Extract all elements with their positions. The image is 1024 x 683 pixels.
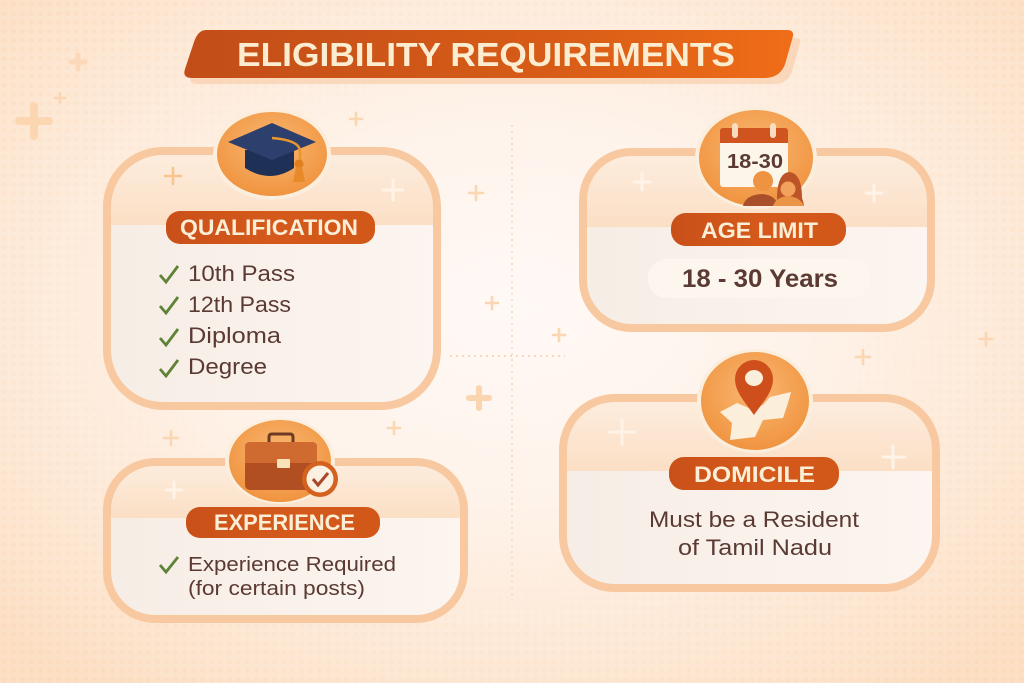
label: qualification: QUALIFICATION <box>180 215 358 240</box>
panel: experience <box>103 418 468 623</box>
panel: qualification <box>103 108 441 410</box>
value: age range <box>648 259 870 298</box>
panel: age limit <box>579 107 935 332</box>
checklist: qualifications <box>160 261 295 379</box>
text: residency requirement: Must be a Resident <box>649 507 859 532</box>
label: age limit: AGE LIMIT <box>701 218 819 243</box>
label: qualification <box>166 211 375 244</box>
title banner <box>184 30 800 84</box>
checklist: qualifications: Diploma <box>188 323 282 348</box>
checklist: qualifications: 12th Pass <box>188 292 291 317</box>
checklist: qualifications: 10th Pass <box>188 261 295 286</box>
icon: briefcase <box>225 418 338 504</box>
value: age range: 18 - 30 Years <box>682 265 838 293</box>
icon: calendar with people <box>695 107 817 209</box>
icon: calendar with people: 18-30 <box>727 151 783 173</box>
text: residency requirement <box>649 507 859 560</box>
label: age limit <box>671 213 846 246</box>
checklist: qualifications: Degree <box>188 354 267 379</box>
icon: map pin <box>697 349 813 453</box>
checklist: experience: Experience Required <box>188 554 396 576</box>
label: domicile: DOMICILE <box>694 462 815 487</box>
title text: ELIGIBILITY REQUIREMENTS <box>237 36 735 73</box>
icon: graduation cap <box>213 108 331 200</box>
label: experience: EXPERIENCE <box>214 510 355 535</box>
label: experience <box>186 507 380 538</box>
checklist: experience <box>160 554 396 600</box>
text: residency requirement: of Tamil Nadu <box>678 535 832 560</box>
panel: domicile <box>559 349 940 592</box>
checklist: experience: (for certain posts) <box>188 578 365 600</box>
label: domicile <box>669 457 839 490</box>
